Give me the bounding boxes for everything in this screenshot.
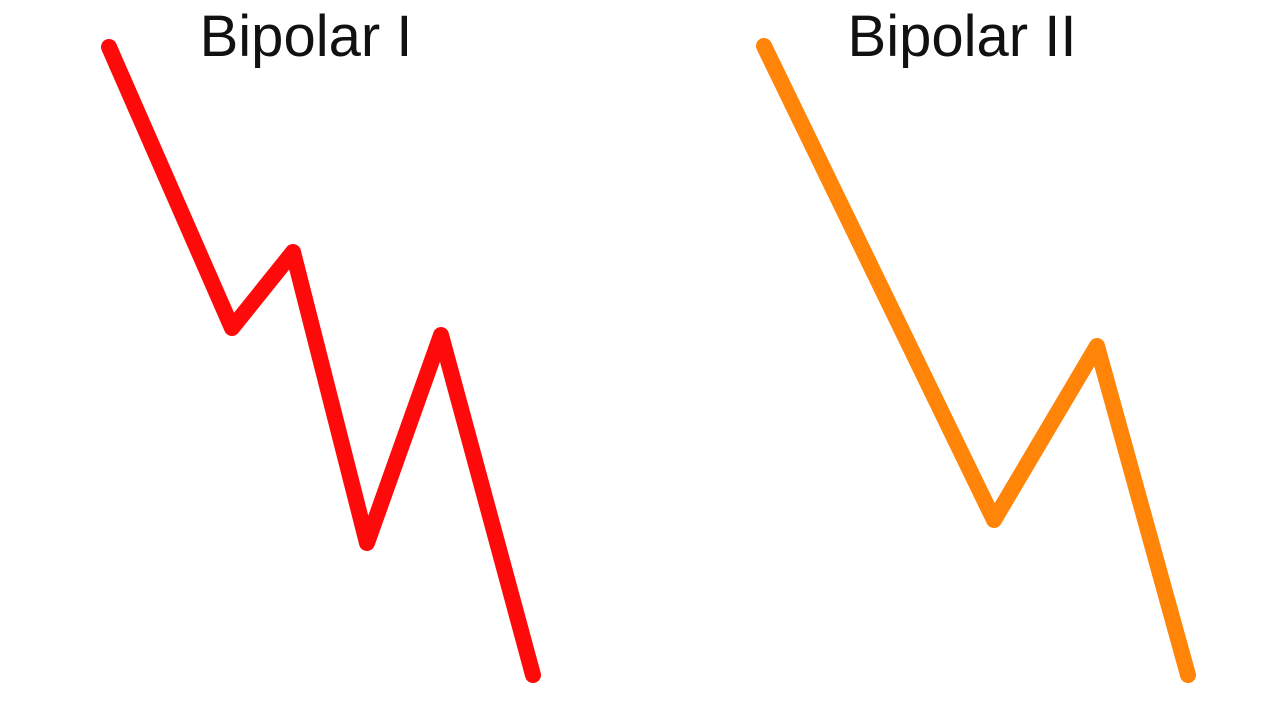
chart: bipolar II mood line bbox=[764, 46, 1188, 675]
title: Bipolar I: Bipolar I bbox=[200, 4, 412, 69]
chart: bipolar I mood line bbox=[109, 47, 533, 675]
panel: bipolar II bbox=[764, 4, 1188, 675]
panel: bipolar I bbox=[109, 4, 533, 675]
title: Bipolar II: Bipolar II bbox=[848, 4, 1076, 69]
